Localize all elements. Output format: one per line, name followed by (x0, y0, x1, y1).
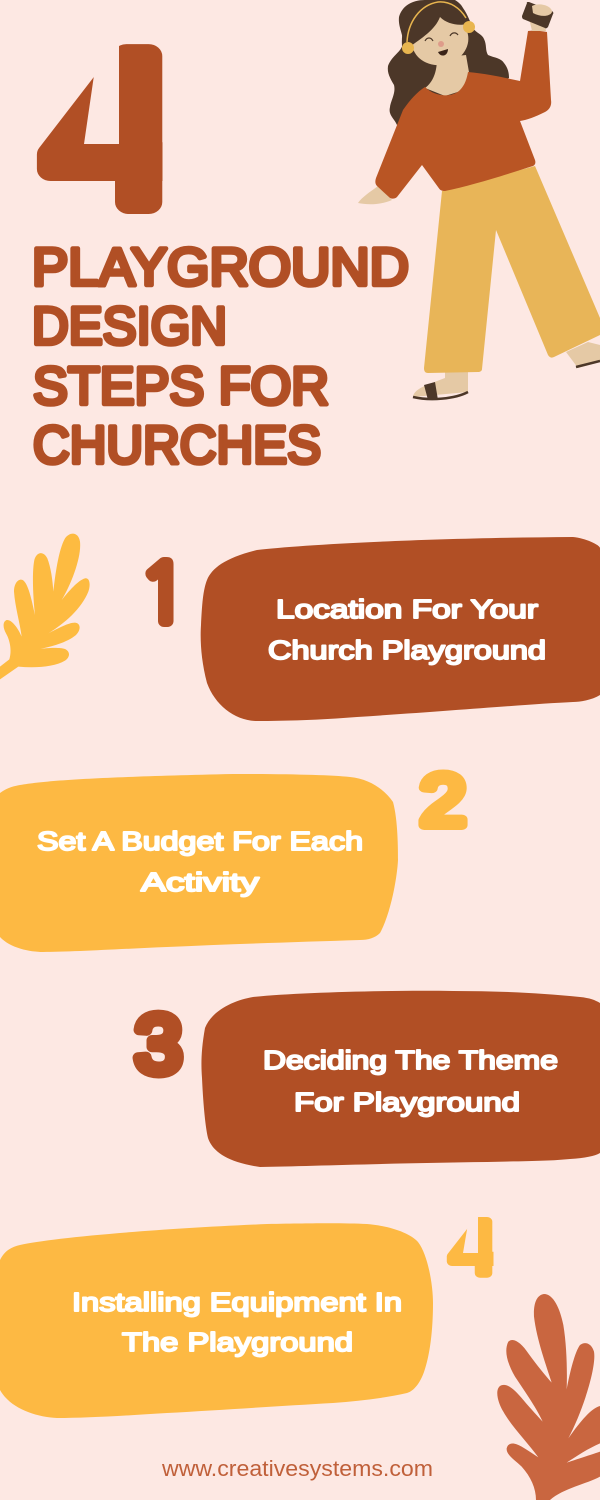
footer website: www.creativesystems.com (161, 1456, 433, 1481)
step 2 label: Activity (141, 867, 259, 897)
step 3 label (263, 1045, 558, 1117)
heading text: DESIGN (32, 297, 227, 356)
step 4 blob (0, 1223, 433, 1418)
step 1 label (268, 594, 546, 665)
earrings (402, 21, 475, 54)
left hand (358, 186, 392, 204)
headband (407, 2, 466, 42)
step 2 label: Set A Budget For Each (37, 826, 363, 856)
step 2 label (37, 826, 363, 897)
sweater (375, 31, 551, 199)
hair fringe (402, 0, 467, 48)
number 1: 1 (139, 554, 187, 634)
step 1 (139, 537, 600, 721)
face (407, 10, 473, 70)
number 4: 4 (450, 1205, 498, 1289)
number 3: 3 (135, 999, 182, 1090)
trousers (424, 166, 600, 373)
smile eyes nose mouth (425, 33, 458, 56)
step 3 blob (201, 991, 600, 1167)
step 1 blob (201, 537, 600, 721)
step 4 label: Installing Equipment In (72, 1287, 402, 1317)
illustration: woman waving with phone (358, 0, 600, 400)
heading text: CHURCHES (33, 416, 321, 475)
step 4 label: The Playground (122, 1327, 353, 1357)
big numeral 4: 4 (45, 10, 179, 247)
step 2 (0, 761, 466, 952)
right foot (566, 342, 600, 368)
step 1 label: Church Playground (268, 635, 546, 665)
neck (425, 55, 470, 96)
icon: terracotta leaf (497, 1294, 600, 1500)
hair back (388, 0, 509, 125)
icon: yellow leaf (0, 534, 90, 679)
step 3 label: Deciding The Theme (263, 1045, 558, 1075)
heading text (32, 238, 409, 475)
title (32, 10, 409, 475)
phone and raised hand (522, 2, 553, 31)
step 2 blob (0, 774, 398, 952)
number 2: 2 (420, 761, 466, 841)
step 3 label: For Playground (294, 1087, 520, 1117)
step 4 label (72, 1287, 402, 1357)
heading text: STEPS FOR (33, 357, 329, 416)
step 1 label: Location For Your (276, 594, 538, 624)
heading text: PLAYGROUND (32, 238, 409, 297)
step 4 (0, 1205, 508, 1418)
step 3 (135, 991, 600, 1167)
left foot with sandal (413, 372, 468, 400)
